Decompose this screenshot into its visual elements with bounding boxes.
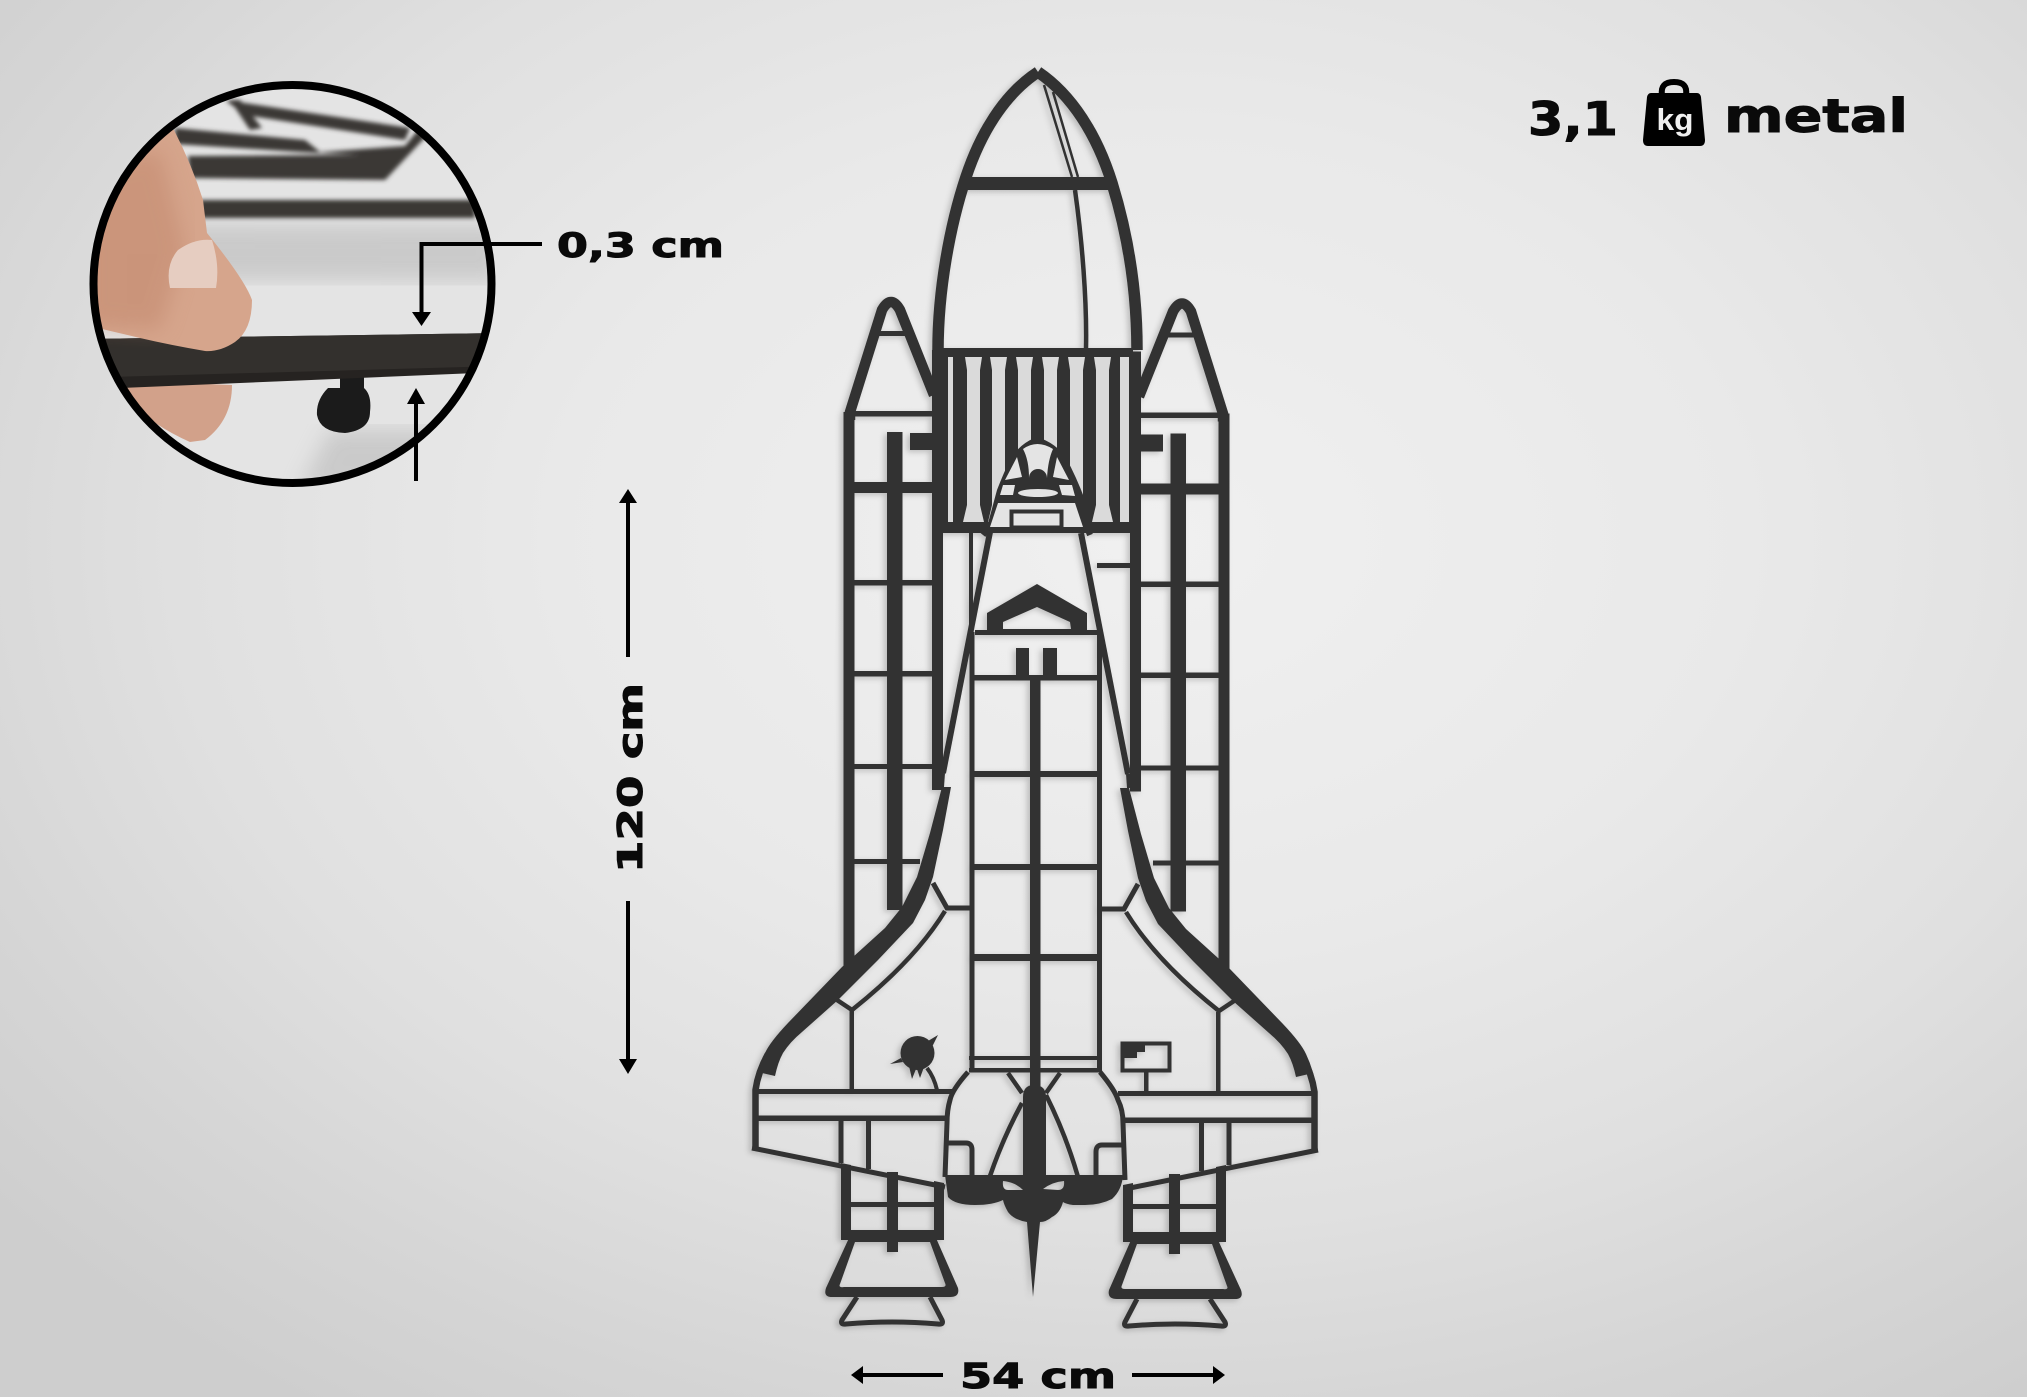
lower finger xyxy=(127,384,232,442)
external tank ribs xyxy=(943,348,1133,633)
close-up photo of metal thickness xyxy=(85,78,505,498)
height dimension arrows xyxy=(619,489,637,1074)
width label: 54 cm xyxy=(960,1357,1116,1397)
orbiter leading edge right xyxy=(1081,533,1316,1088)
orbiter leading edge left xyxy=(755,532,990,1087)
right wing xyxy=(1118,1012,1318,1189)
icon: kg weight bag xyxy=(1643,82,1705,146)
planet emblem xyxy=(890,1035,938,1090)
shuttle metal silhouette xyxy=(752,72,1318,1326)
thumbnail xyxy=(169,240,217,288)
shuttle cockpit xyxy=(983,437,1090,535)
bolt xyxy=(317,375,370,433)
orbiter fuselage panels xyxy=(969,584,1102,1093)
metal strip xyxy=(85,333,500,388)
thickness callout arrow bottom xyxy=(407,388,425,481)
weight label number: 3,1 xyxy=(1528,92,1618,146)
tail and engine section xyxy=(945,1072,1125,1297)
left wing xyxy=(752,1010,952,1187)
external tank nose cone xyxy=(938,72,1137,350)
material label: metal xyxy=(1724,89,1908,143)
left solid rocket booster xyxy=(844,302,943,968)
right solid rocket booster xyxy=(1130,304,1230,970)
thickness callout arrow top xyxy=(412,244,542,326)
thumb xyxy=(85,130,252,351)
flag emblem xyxy=(1122,1044,1170,1092)
width dimension arrows xyxy=(851,1366,1225,1384)
icon: kg weight bag: kg xyxy=(1656,102,1694,137)
thickness label: 0,3 cm xyxy=(557,226,724,266)
left main engine and nozzle xyxy=(825,1163,958,1324)
height label: 120 cm xyxy=(611,683,651,873)
right main engine and nozzle xyxy=(1109,1165,1242,1326)
